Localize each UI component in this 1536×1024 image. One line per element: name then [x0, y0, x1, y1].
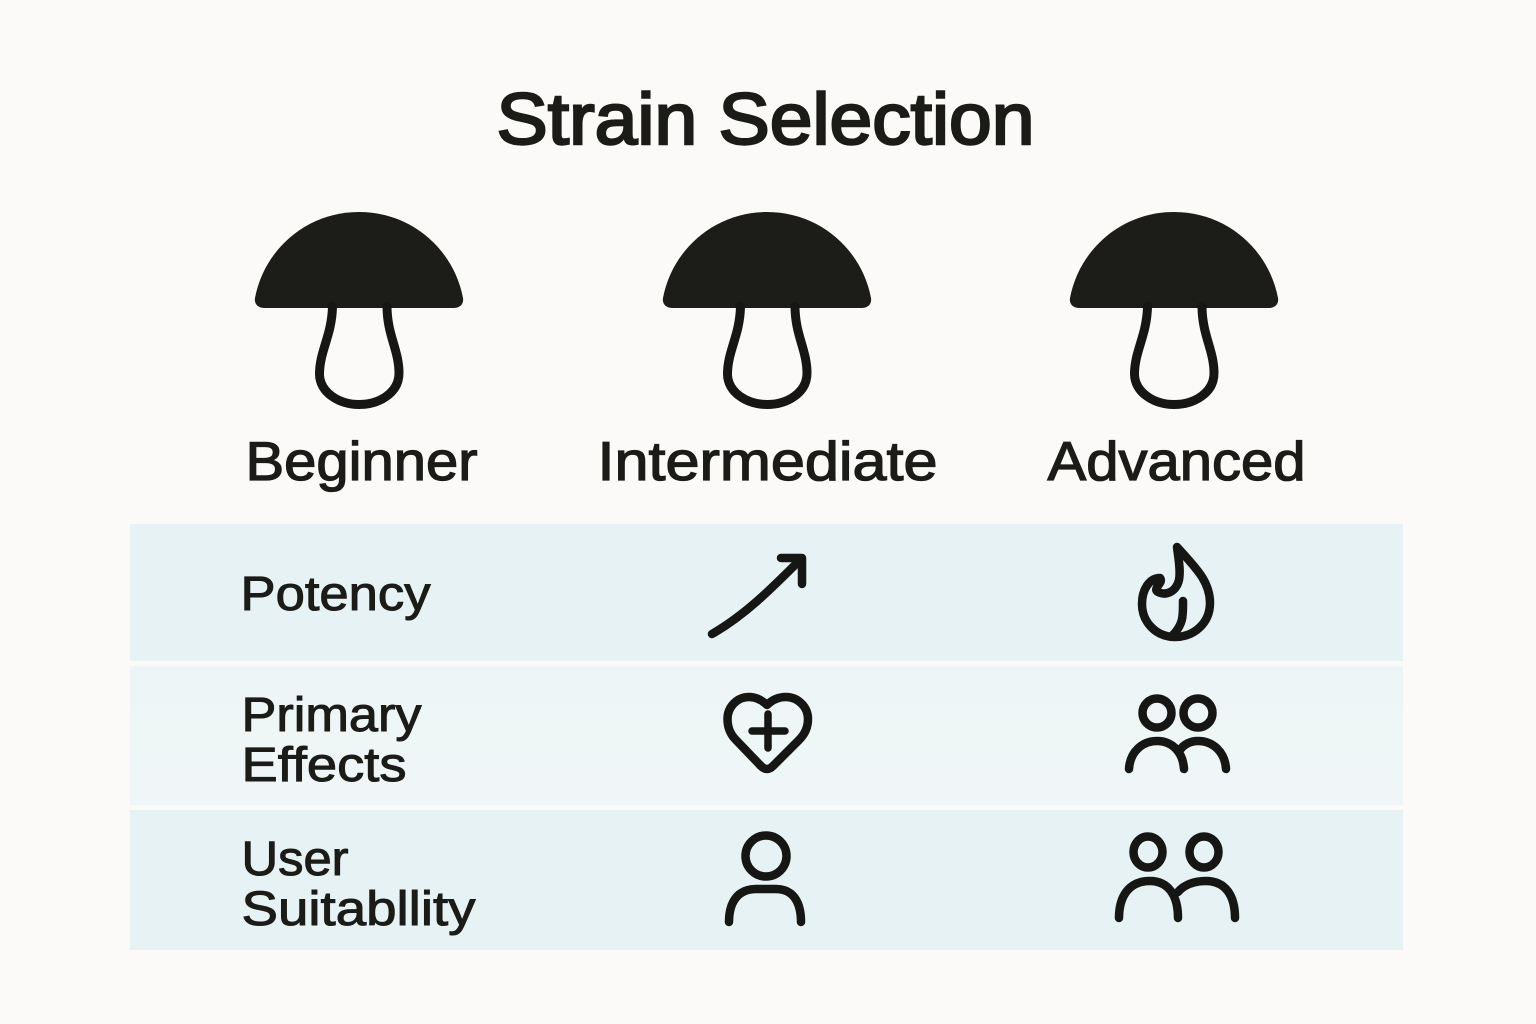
icon: mushroom advanced	[1070, 212, 1278, 404]
icon: flame	[1142, 547, 1210, 637]
icon: two people	[1129, 698, 1226, 769]
label: Potency: Potency	[240, 568, 430, 621]
label: User Suitability	[242, 833, 476, 936]
label: Primary Effects: Primary	[242, 689, 422, 742]
panel: user suitability row	[130, 810, 1403, 950]
panel: potency row	[130, 524, 1403, 661]
icon: mushroom beginner	[255, 212, 463, 404]
label: Primary Effects	[242, 689, 422, 792]
label: Beginner: Beginner	[246, 430, 478, 492]
column: Intermediate	[598, 212, 938, 492]
title: Strain Selection	[496, 80, 1034, 160]
label: Intermediate: Intermediate	[598, 430, 938, 492]
panel: primary effects row	[130, 666, 1403, 805]
icon: plus	[752, 714, 785, 748]
column: Beginner	[246, 212, 478, 492]
icon: heart with plus	[728, 697, 808, 769]
icon: group of people	[1119, 836, 1235, 918]
label: Primary Effects: Effects	[242, 739, 406, 792]
label: User Suitability: User	[242, 833, 349, 886]
icon: rising arrow	[712, 558, 802, 634]
label: User Suitability: Suitabllity	[242, 883, 476, 936]
column: Advanced	[1048, 212, 1306, 492]
icon: mushroom intermediate	[663, 212, 871, 404]
label: Advanced: Advanced	[1048, 430, 1306, 492]
icon: single person	[729, 836, 801, 922]
